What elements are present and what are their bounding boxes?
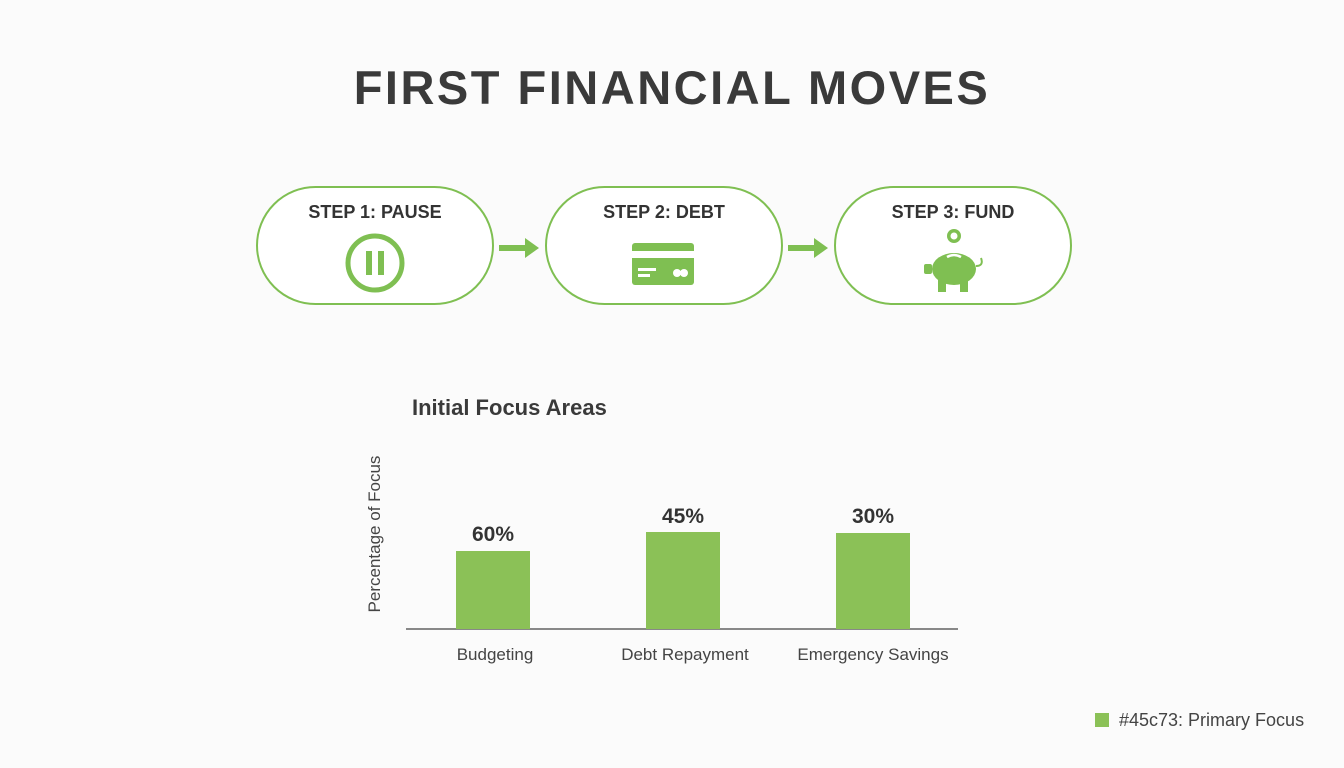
bar: debt [646, 532, 720, 629]
step 2 pill [545, 186, 783, 305]
x label debt: Debt Repayment [621, 645, 749, 664]
bar: budgeting [456, 551, 530, 629]
icon: credit card [632, 243, 694, 285]
axis line [406, 628, 958, 630]
value 30%: 30% [852, 505, 894, 528]
icon: pause [346, 234, 404, 292]
arrow 2 [788, 238, 828, 258]
step 1 pill: STEP 1: PAUSE [308, 202, 442, 222]
icon: piggy bank [924, 229, 983, 292]
value 45%: 45% [662, 505, 704, 528]
arrow 1 [499, 238, 539, 258]
value 60%: 60% [472, 523, 514, 546]
step 3 pill: STEP 3: FUND [892, 202, 1014, 222]
legend: #45c73: Primary Focus [1119, 710, 1304, 730]
y axis label: Percentage of Focus [365, 456, 384, 612]
x label emergency: Emergency Savings [797, 645, 949, 664]
title: FIRST FINANCIAL MOVES [354, 61, 990, 114]
step 3 pill [834, 186, 1072, 305]
bar: emergency [836, 533, 910, 629]
chart title: Initial Focus Areas [412, 395, 607, 420]
step 2 pill: STEP 2: DEBT [603, 202, 725, 222]
step 1 pill [256, 186, 494, 305]
x label budgeting: Budgeting [457, 645, 533, 664]
